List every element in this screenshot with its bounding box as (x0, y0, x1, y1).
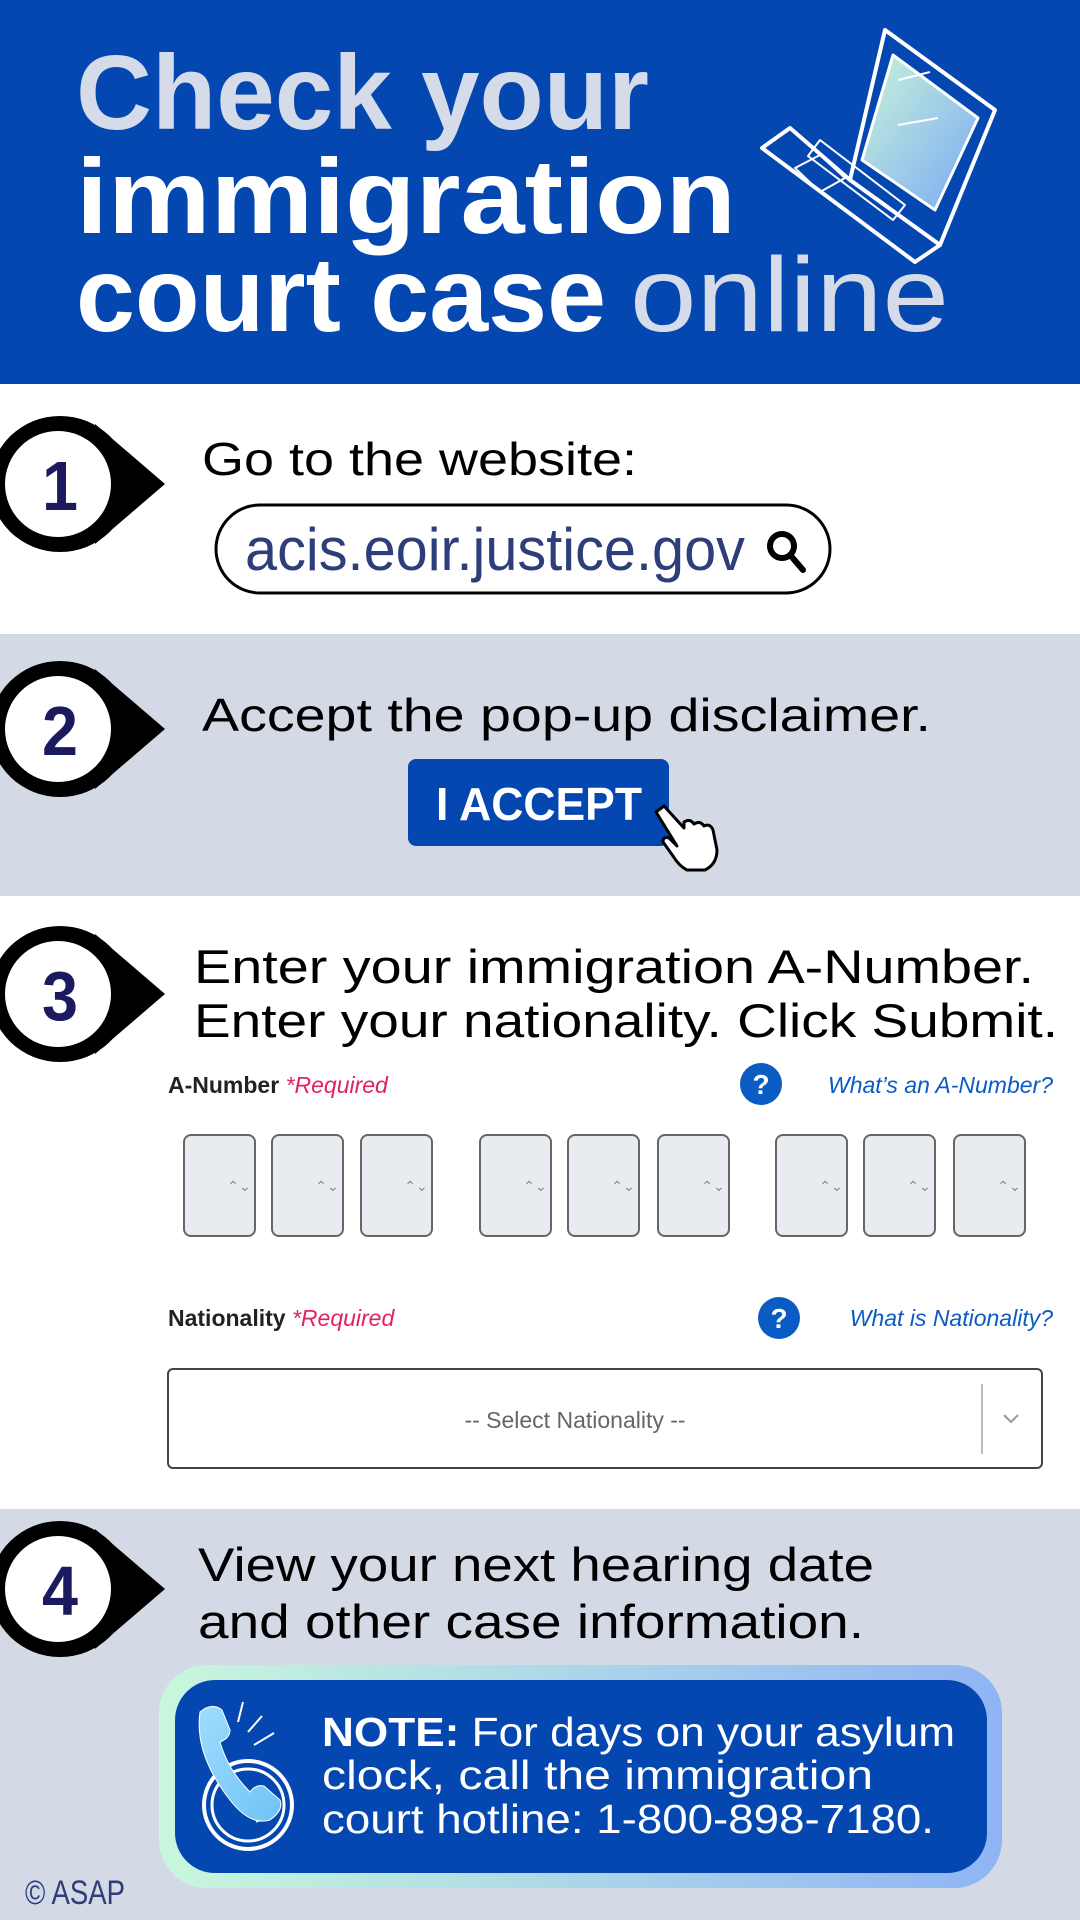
form: A-number: ? (752, 1069, 770, 1100)
form: A-number: ⌃⌄ (315, 1178, 339, 1194)
button: I accept: I ACCEPT (436, 778, 642, 830)
form: A-number: ⌃⌄ (701, 1178, 725, 1194)
callout: note: clock, call the immigration (322, 1752, 873, 1798)
badge 3 (0, 926, 165, 1062)
step 3 text (194, 940, 1058, 1047)
step 4 text (198, 1538, 874, 1648)
form: A-number: ⌃⌄ (404, 1178, 428, 1194)
form: A-number: ⌃⌄ (997, 1178, 1021, 1194)
title: Check your (76, 34, 649, 152)
form: A-number: ⌃⌄ (611, 1178, 635, 1194)
callout: note (159, 1665, 1002, 1888)
title (76, 34, 949, 354)
icon: search (770, 534, 803, 570)
button: I accept (408, 759, 669, 846)
callout: note: court hotline: 1-800-898-7180. (322, 1796, 934, 1842)
badge 4 (0, 1521, 165, 1657)
title: immigration (76, 138, 736, 256)
step 3 text: Enter your nationality. Click Submit. (194, 994, 1058, 1047)
badge 3: 3 (42, 957, 78, 1035)
credit: © ASAP (25, 1874, 125, 1912)
step 4 text: View your next hearing date (198, 1538, 874, 1591)
form: A-number: ⌃⌄ (523, 1178, 547, 1194)
form: nationality: What is Nationality? (850, 1305, 1053, 1331)
title: online (630, 236, 949, 354)
panel: step 3 (0, 896, 1080, 1509)
form: nationality (168, 1297, 1053, 1468)
step 4 text: and other case information. (198, 1595, 864, 1648)
step 3 text: Enter your immigration A-Number. (194, 940, 1034, 993)
form: A-number (168, 1063, 1053, 1236)
url pill: acis.eoir.justice.gov (245, 516, 745, 583)
step 1 text: Go to the website: (202, 433, 637, 485)
form: nationality: Nationality *Required (168, 1305, 395, 1331)
step 2 text: Accept the pop-up disclaimer. (202, 689, 931, 741)
badge 2: 2 (42, 692, 78, 770)
badge 1: 1 (42, 447, 78, 525)
form: A-number: ⌃⌄ (227, 1178, 251, 1194)
header panel (0, 0, 1080, 384)
panel: step 1 (0, 384, 1080, 634)
form: A-number: ⌃⌄ (819, 1178, 843, 1194)
callout: note: NOTE: For days on your asylum (322, 1709, 955, 1755)
badge 4: 4 (42, 1552, 78, 1630)
form: nationality: -- Select Nationality -- (464, 1407, 686, 1433)
url pill (216, 505, 830, 593)
form: A-number: What’s an A-Number? (828, 1072, 1053, 1098)
icon: hand cursor (656, 806, 717, 870)
panel: step 4 (0, 1509, 1080, 1920)
badge 2 (0, 661, 165, 797)
badge 1 (0, 416, 165, 552)
form: A-number: A-Number *Required (168, 1072, 389, 1098)
panel: step 2 (0, 634, 1080, 896)
form: nationality: ? (770, 1303, 788, 1334)
title: court case (76, 236, 606, 354)
icon: phone clock (199, 1702, 292, 1849)
form: A-number: ⌃⌄ (907, 1178, 931, 1194)
icon: laptop (762, 30, 995, 262)
